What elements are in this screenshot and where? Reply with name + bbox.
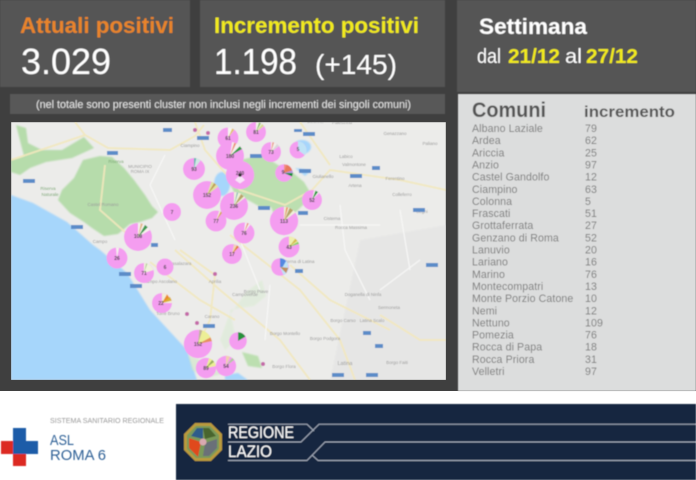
map place labels: Ciampino — [180, 143, 200, 148]
pie values: 7 — [171, 210, 174, 216]
footer: regione lazio banner — [176, 404, 696, 480]
table rows: Marino — [472, 269, 505, 281]
roads — [11, 122, 446, 380]
pie values: 93 — [191, 167, 197, 173]
pie: 77 — [206, 210, 226, 232]
heading: settimana: Settimana — [479, 14, 588, 39]
text: roma 6: ROMA 6 — [50, 447, 106, 464]
table rows: 97 — [585, 159, 597, 171]
pie: 71 — [134, 263, 154, 283]
table rows: 97 — [585, 366, 597, 378]
heading: incremento: incremento — [584, 104, 675, 121]
map place labels: Torre Bruno — [156, 311, 180, 316]
date range — [477, 46, 638, 68]
map place labels: Borgo Montello — [270, 331, 301, 336]
table rows: 76 — [585, 330, 597, 342]
icon: cross — [1, 428, 38, 466]
table rows: Velletri — [472, 366, 505, 378]
map place labels: Valmontone — [342, 162, 366, 167]
number: 3.029: 3.029 — [21, 41, 111, 82]
map place labels: Segni — [416, 209, 428, 214]
panel: comuni list — [458, 94, 696, 391]
table rows: 25 — [585, 147, 597, 159]
map place labels: Palestrina — [332, 120, 352, 125]
map place labels: Latina — [338, 361, 353, 367]
number: 1.198: 1.198 — [214, 41, 297, 82]
text: lazio: LAZIO — [228, 442, 272, 461]
map place labels: Colonna — [307, 119, 324, 124]
pie: 236 — [220, 192, 248, 220]
map place labels: Latina Scalo — [360, 318, 385, 323]
heading: attuali positivi: Attuali positivi — [20, 13, 174, 38]
table rows: 52 — [585, 232, 597, 244]
table rows: 79 — [585, 123, 597, 135]
table rows: 51 — [585, 208, 597, 220]
pie: 26 — [106, 248, 128, 268]
pie values: 73 — [268, 150, 274, 156]
map place labels: Giulianello — [312, 174, 334, 179]
map place labels: Riserva — [108, 159, 124, 164]
table rows: 13 — [585, 281, 597, 293]
highway shields — [23, 128, 438, 377]
map place labels: Sermoneta — [378, 305, 401, 310]
table rows: Genzano di Roma — [472, 232, 559, 244]
table rows: 27 — [585, 220, 597, 232]
pie values: 152 — [194, 342, 202, 348]
map place labels: Cisterna — [324, 216, 341, 221]
pie: 152 — [193, 181, 221, 209]
map place labels — [40, 119, 438, 369]
map place labels: Doganella di Ninfa — [345, 292, 382, 297]
table rows: Pomezia — [472, 330, 514, 342]
pie values: 43 — [286, 245, 292, 251]
pie: 52 — [302, 190, 322, 210]
pie: 5 — [290, 142, 306, 158]
pie: 8 green — [229, 332, 247, 350]
map place labels: Borgo Faiti — [386, 360, 408, 365]
heading: incremento positivi: Incremento positivi — [214, 13, 419, 38]
map place labels: Artena — [348, 183, 362, 188]
map place labels: Labico — [339, 154, 353, 159]
pie values: 5 — [297, 147, 300, 153]
map place labels: Campo Ascolano — [143, 279, 178, 284]
table rows: 18 — [585, 342, 597, 354]
table rows: Anzio — [472, 159, 499, 171]
pie markers — [106, 122, 322, 378]
map place labels: Genazzano — [383, 131, 407, 136]
banner lines — [228, 424, 696, 460]
table rows: Lariano — [472, 257, 508, 269]
map place labels: Castel Romano — [87, 202, 119, 207]
heading: comuni: Comuni — [472, 99, 546, 122]
pie: 108 — [124, 223, 152, 251]
pie values: 180 — [226, 154, 234, 160]
table rows: 62 — [585, 135, 597, 147]
pie: 113 — [270, 207, 298, 235]
pie: 9 — [275, 164, 293, 182]
pie: 7 lower — [271, 258, 289, 276]
pie values: 17 — [229, 252, 235, 258]
date range: 21/12 — [508, 46, 560, 68]
pie values: 52 — [309, 198, 315, 204]
table rows: Ciampino — [472, 184, 518, 196]
date range: dal — [477, 46, 501, 68]
table rows: 5 — [585, 196, 591, 208]
date range: al — [565, 46, 582, 68]
map place labels: Riserva — [40, 186, 56, 191]
map place labels: Paliano — [422, 141, 438, 146]
pie values: 61 — [225, 136, 231, 142]
pie: 89 — [196, 358, 216, 378]
pie values: 81 — [253, 130, 259, 136]
table rows: Castel Gandolfo — [472, 172, 549, 184]
panel: settimana — [457, 0, 696, 92]
table rows: 109 — [585, 317, 603, 329]
map place labels: Borgo Piave — [244, 289, 269, 294]
text: sistema sanitario regionale: SISTEMA SANITARIO REGIONALE — [50, 418, 164, 425]
table rows: 20 — [585, 244, 597, 256]
map place labels: Colleferro — [392, 192, 412, 197]
map place labels: Cisterna di Latina — [279, 259, 315, 264]
map place labels: Campo — [93, 239, 108, 244]
table rows: Rocca di Papa — [472, 342, 542, 354]
pie: 7 — [163, 203, 181, 221]
map place labels: Borgo Podgora — [310, 336, 341, 341]
pie values — [114, 130, 315, 372]
note text: (nel totale sono presenti cluster non inclusi negli incrementi dei singoli comuni) — [36, 99, 411, 111]
date range: 27/12 — [586, 46, 638, 68]
pie: 180 — [216, 142, 244, 170]
terrain and water — [11, 125, 446, 380]
pie values: 113 — [280, 219, 288, 225]
table rows: Lanuvio — [472, 244, 510, 256]
number: +145: (+145) — [315, 49, 397, 80]
icon: regione lazio emblem — [184, 423, 222, 461]
table rows: Rocca Priora — [472, 354, 534, 366]
map place labels: Borgo Carso — [330, 318, 356, 323]
pie values: 236 — [230, 204, 238, 210]
pie values: 76 — [241, 231, 247, 237]
table rows: 10 — [585, 293, 597, 305]
panel: incremento positivi — [200, 0, 445, 87]
pie: 76 — [234, 222, 254, 244]
map panel — [11, 119, 446, 380]
map place labels: Borgo Flora — [272, 364, 296, 369]
table rows: Monte Porzio Catone — [472, 293, 573, 305]
table rows: 76 — [585, 269, 597, 281]
table rows: Montecompatri — [472, 281, 543, 293]
pie: 73 — [261, 142, 281, 162]
pie: 61 — [218, 128, 238, 148]
table rows: Grottaferrata — [472, 220, 533, 232]
pie values: 22 — [158, 301, 164, 307]
pie values: 152 — [203, 193, 211, 199]
table rows: Frascati — [472, 208, 510, 220]
table rows: Nettuno — [472, 317, 510, 329]
map place labels: Campoverde — [232, 292, 258, 297]
pie: 22 — [152, 293, 172, 313]
table rows: Albano Laziale — [472, 123, 543, 135]
map place labels: Casalazara — [169, 261, 192, 266]
footer: ASL Roma 6 logo — [1, 418, 164, 466]
note bar — [10, 94, 445, 114]
pie values: 89 — [203, 366, 209, 372]
map place labels: Rocca Massima — [335, 225, 367, 230]
pie values: 26 — [114, 256, 120, 262]
pie: 17 — [222, 244, 242, 264]
table rows: 16 — [585, 257, 597, 269]
map place labels: ROMA IX — [131, 169, 149, 174]
pie: 81 — [246, 122, 266, 142]
table rows: 63 — [585, 184, 597, 196]
pie: 6 — [156, 258, 174, 276]
table rows: Colonna — [472, 196, 512, 208]
map place labels: Carano — [205, 314, 220, 319]
table rows — [472, 123, 603, 378]
pie values: 9 — [282, 170, 285, 176]
map place labels: Ferentino — [385, 176, 405, 181]
text: ASL: ASL — [50, 432, 74, 449]
pie: 54 — [216, 356, 236, 376]
pie values: 77 — [213, 219, 219, 225]
table rows: Nemi — [472, 305, 497, 317]
map place labels: Naturale — [41, 192, 59, 197]
pie values: 54 — [223, 364, 229, 370]
pie: 43 — [278, 236, 300, 258]
pie values: 108 — [134, 234, 142, 240]
pie values: 6 — [164, 265, 167, 271]
pie: 240 — [226, 161, 254, 189]
small location pins — [185, 128, 265, 366]
map place labels: MUNICIPIO — [128, 164, 152, 169]
table rows: Ariccia — [472, 147, 504, 159]
table rows: 31 — [585, 354, 597, 366]
pie: 93 — [183, 158, 205, 180]
pie values: 240 — [236, 171, 244, 177]
text: regione: REGIONE — [228, 423, 294, 442]
table rows: Ardea — [472, 135, 501, 147]
pie values: 71 — [141, 271, 147, 277]
table rows: 12 — [585, 305, 597, 317]
map place labels: Aprilia — [209, 279, 222, 284]
pie: 152 south — [184, 330, 212, 358]
table rows: 12 — [585, 172, 597, 184]
panel: attuali positivi — [0, 0, 190, 87]
